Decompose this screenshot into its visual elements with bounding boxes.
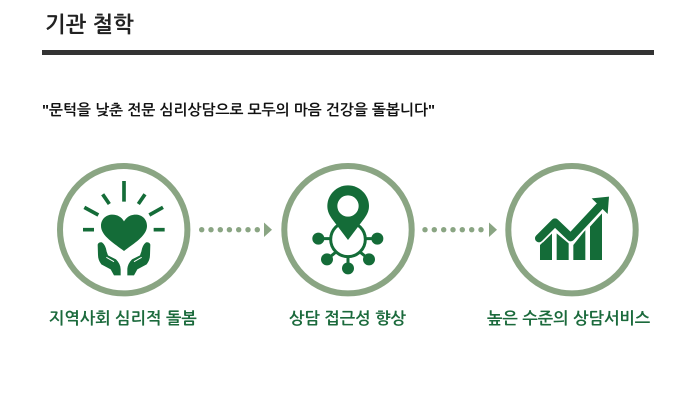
icon: map pin with nodes <box>312 185 383 274</box>
title rule <box>42 50 654 55</box>
arrow 1 <box>199 222 272 237</box>
title: 기관 철학 <box>45 12 134 37</box>
label 3: 높은 수준의 상담서비스 <box>487 310 650 328</box>
label 2: 상담 접근성 향상 <box>289 310 406 328</box>
icon: heart and hands <box>83 181 165 275</box>
arrow 2 <box>422 222 497 237</box>
label 1: 지역사회 심리적 돌봄 <box>49 310 197 328</box>
mission statement: "문턱을 낮춘 전문 심리상담으로 모두의 마음 건강을 돌봅니다" <box>42 103 435 119</box>
circle 1: heart in hands <box>60 166 187 293</box>
icon: rising bar chart <box>539 197 609 260</box>
circle 2: location network <box>284 166 412 293</box>
circle 3: growth chart <box>508 166 636 293</box>
